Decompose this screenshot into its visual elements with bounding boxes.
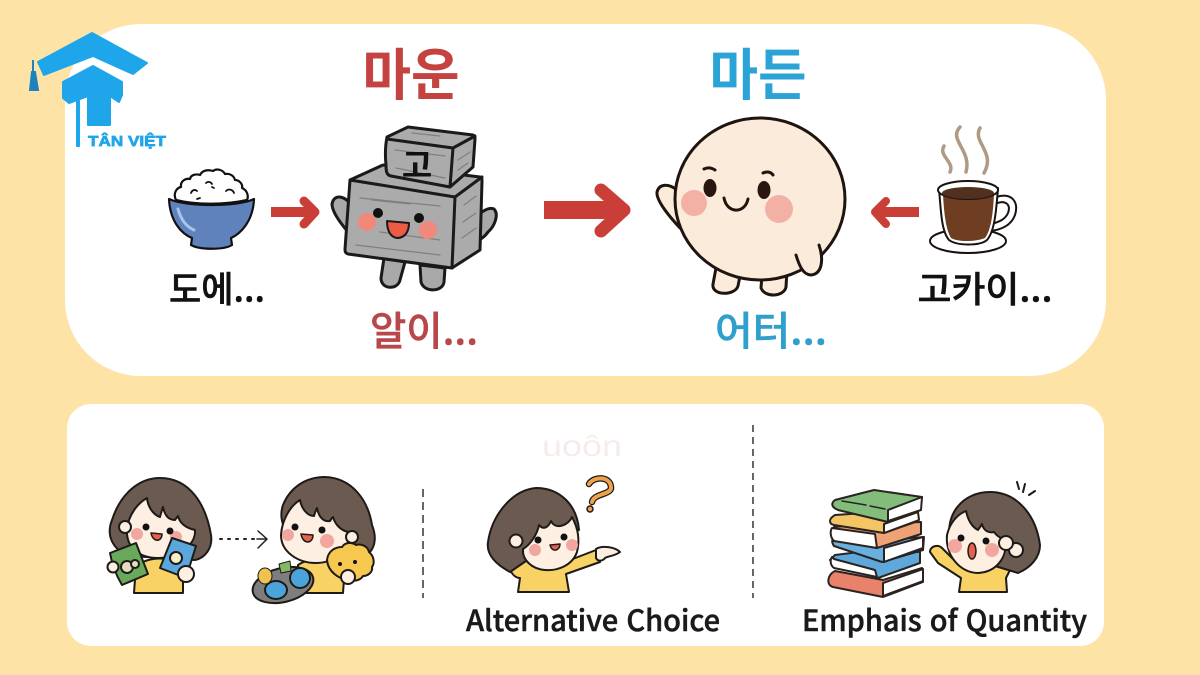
icon: coffee cup <box>930 127 1016 253</box>
book green <box>832 490 922 522</box>
label: 어터...: 어터... <box>715 299 827 357</box>
kid: with plate and cookie <box>249 477 375 609</box>
book yellow <box>830 510 918 533</box>
hair <box>110 478 211 560</box>
book orange <box>834 522 921 548</box>
round arm <box>657 185 680 228</box>
round body <box>675 118 845 280</box>
kid: holding snacks <box>108 478 211 593</box>
book blue 2 <box>830 550 920 578</box>
stone arms <box>332 197 496 243</box>
logo: Tan Viet: TÂN VIỆT <box>88 132 166 150</box>
raised hand <box>510 534 522 548</box>
blush <box>358 213 437 239</box>
steam <box>943 127 987 173</box>
face <box>523 517 578 570</box>
eyes <box>704 179 770 199</box>
hair <box>488 488 579 572</box>
caption: Emphais of Quantity: Emphais of Quantity <box>802 598 1087 640</box>
surprise lines <box>1017 482 1035 495</box>
book blue 1 <box>832 534 924 562</box>
body <box>930 546 1014 592</box>
body <box>134 558 183 593</box>
logo: Tan Viet <box>30 33 166 150</box>
round hand <box>796 245 822 275</box>
stone body <box>345 165 482 268</box>
arrow: dotted <box>220 531 267 548</box>
round legs <box>713 268 740 293</box>
divider: right <box>752 425 754 598</box>
character: round dumpling <box>657 118 845 295</box>
eyes <box>373 208 424 223</box>
heading: 마든: 마든 <box>710 31 806 112</box>
mouth <box>387 221 409 238</box>
divider: left <box>422 489 424 598</box>
kid: alternative choice <box>488 478 620 592</box>
label: 알이...: 알이... <box>370 299 478 357</box>
cookie <box>327 543 374 581</box>
character: stone block <box>332 127 496 290</box>
arrow: coffee to dumpling <box>875 201 919 224</box>
icon: book stack <box>828 490 924 597</box>
label: 고카이...: 고카이... <box>918 261 1052 313</box>
kid: surprised <box>930 482 1040 592</box>
arrow: large center <box>544 190 624 231</box>
stone top block <box>385 127 475 187</box>
faint ghost text: uoôn <box>542 430 622 463</box>
plate <box>249 561 317 609</box>
arrow: rice to stone <box>271 201 315 224</box>
hand on head <box>999 536 1013 550</box>
blue snack <box>160 538 196 578</box>
body and pointing arm <box>507 548 600 592</box>
blush <box>681 190 793 223</box>
mouth <box>724 198 748 210</box>
panel: bottom usage examples <box>67 404 1104 646</box>
book red <box>828 568 923 597</box>
caption: Alternative Choice: Alternative Choice <box>466 598 720 640</box>
label: 도에...: 도에... <box>169 261 265 313</box>
face <box>947 511 1006 573</box>
stone legs <box>381 258 445 290</box>
hair <box>949 492 1040 573</box>
glyph on stone: 고: 고 <box>402 139 432 187</box>
icon: rice bowl <box>169 170 254 249</box>
heading: 마운: 마운 <box>362 31 460 112</box>
green snack <box>110 543 148 585</box>
face <box>127 498 195 558</box>
question mark <box>587 478 611 512</box>
panel: top comparison <box>65 24 1106 376</box>
